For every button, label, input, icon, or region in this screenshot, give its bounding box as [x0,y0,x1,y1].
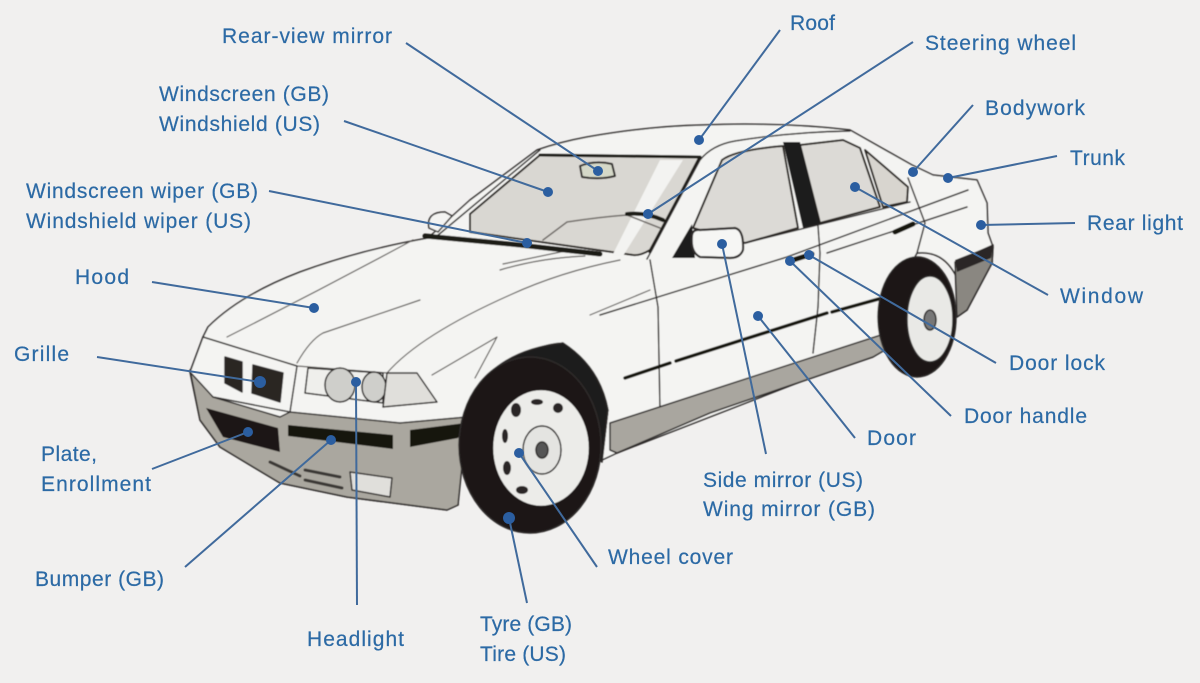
label: rear-view mirror: Rear-view mirror [222,25,392,48]
car body [190,124,993,510]
label: windscreen: Windshield (US) [159,113,320,136]
label: plate [41,443,151,496]
rubbing strip [625,295,893,378]
rear bumper [955,245,993,317]
label: windscreen wiper: Windscreen wiper (GB) [26,180,258,203]
car illustration [190,124,993,533]
label: hood: Hood [75,266,129,289]
label: bodywork: Bodywork [985,97,1086,120]
label: windscreen wiper [26,180,258,233]
windscreen glass [470,155,700,255]
label: side mirror [703,469,875,521]
body lines [600,178,968,410]
label: tyre: Tyre (GB) [480,613,572,636]
rear-view mirror [580,162,615,178]
rear side window [800,140,880,223]
grille [190,337,297,412]
front wheel [459,343,608,533]
label: roof: Roof [790,12,835,35]
door handles [790,224,913,261]
label: windscreen: Windscreen (GB) [159,83,329,106]
mirror shadow triangle [672,224,695,258]
label: door lock: Door lock [1009,352,1106,375]
front bumper [190,370,467,510]
label: windscreen [159,83,329,136]
label: grille: Grille [14,343,69,366]
label: wheel cover: Wheel cover [608,546,733,569]
far side mirror [429,212,452,232]
A pillar outline [437,131,850,259]
steering wheel [627,214,663,220]
label: tyre [480,613,572,666]
front side window [693,146,798,243]
label: side mirror: Side mirror (US) [703,469,863,492]
label: tyre: Tire (US) [480,643,566,666]
label: headlight: Headlight [307,628,404,651]
label: door handle: Door handle [964,405,1087,428]
label: plate: Enrollment [41,473,151,496]
dashboard [543,215,660,240]
leader lines and dots [97,30,1075,605]
label: steering wheel: Steering wheel [925,32,1076,55]
label: door: Door [867,427,916,450]
label: rear light: Rear light [1087,212,1183,235]
sill [610,333,890,453]
rear wheel [878,257,956,377]
label: window: Window [1060,285,1144,308]
label: plate: Plate, [41,443,97,466]
quarter window [865,150,908,207]
label: windscreen wiper: Windshield wiper (US) [26,210,251,233]
windscreen top shade [540,155,700,252]
label: trunk: Trunk [1070,147,1126,170]
label: bumper: Bumper (GB) [35,568,164,591]
window pillar [783,142,820,228]
wiper band [425,236,600,254]
headlight [305,368,437,407]
hood lines [220,240,650,378]
windscreen reflection [612,160,683,256]
wing mirror [692,228,743,258]
label: side mirror: Wing mirror (GB) [703,498,875,521]
